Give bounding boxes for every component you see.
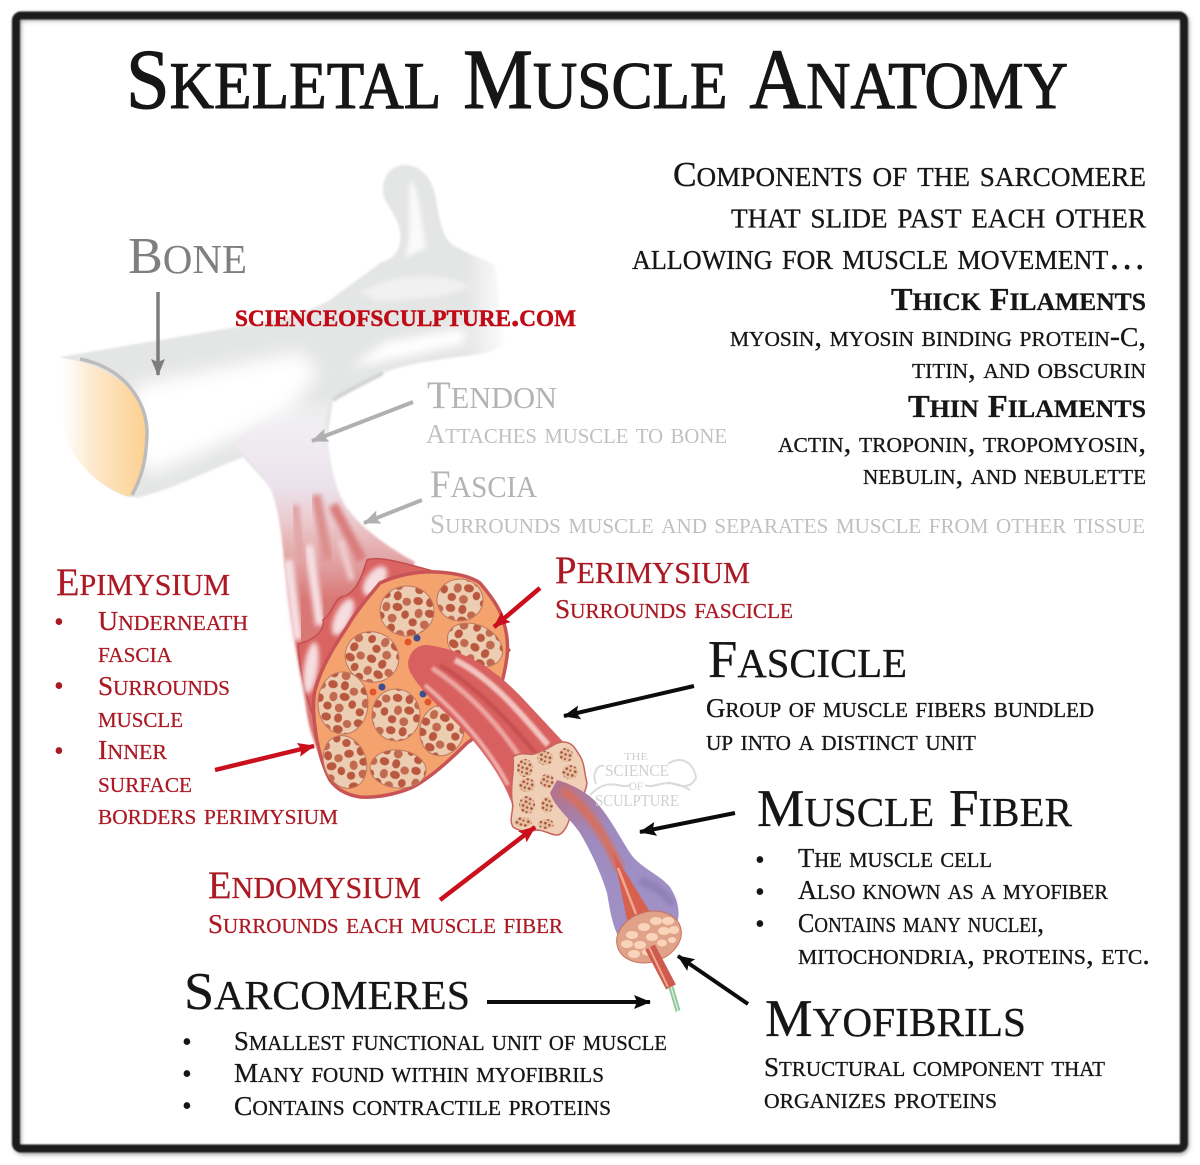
label: epimysium: fascia xyxy=(98,636,173,669)
label: epimysium: borders perimysium xyxy=(98,798,338,831)
myofibril cross-section xyxy=(610,903,688,971)
label: endomysium xyxy=(208,827,563,940)
label: epimysium: • xyxy=(54,607,64,638)
label: muscle fiber: Also known as a myofiber xyxy=(798,873,1108,906)
label: epimysium xyxy=(54,556,338,831)
label: tendon: Attaches muscle to bone xyxy=(426,417,727,450)
label: muscle fiber: • xyxy=(755,877,765,908)
label: sarcomeres: Sarcomeres xyxy=(184,956,470,1022)
label: bone: Bone xyxy=(128,221,247,286)
website url: scienceofsculpture.com xyxy=(235,298,576,334)
text block: components of the sarcomere: Components of the sarcomere xyxy=(673,152,1146,195)
label: muscle fiber: Contains many nuclei, xyxy=(798,906,1044,939)
label: sarcomeres xyxy=(182,956,667,1122)
text block: components of the sarcomere: myosin, myosin binding protein- C, xyxy=(730,320,1146,353)
label: epimysium: Underneath xyxy=(98,604,248,637)
label: tendon: Tendon xyxy=(427,369,557,418)
label: myofibrils: organizes proteins xyxy=(764,1082,997,1115)
label: sarcomeres: • xyxy=(182,1027,192,1058)
label: perimysium: Surrounds fascicle xyxy=(555,592,793,625)
label: sarcomeres: Smallest functional unit of muscle xyxy=(234,1024,667,1057)
watermark logo: SCIENCE xyxy=(605,761,669,780)
text block: components of the sarcomere: Thin Filaments xyxy=(908,386,1146,425)
label: fascia xyxy=(364,458,1145,540)
text block: components of the sarcomere: allowing for muscle movement… xyxy=(632,235,1146,278)
label: endomysium: Endomysium xyxy=(208,859,421,908)
label: muscle fiber: Muscle Fiber xyxy=(757,773,1073,839)
text block: components of the sarcomere: that slide past each other xyxy=(731,194,1146,236)
label: fascicle: up into a distinct unit xyxy=(706,724,976,757)
label: sarcomeres: Contains contractile proteins xyxy=(234,1089,611,1122)
fascicle cross-section xyxy=(511,742,587,835)
watermark logo: OF xyxy=(629,779,643,793)
label: sarcomeres: • xyxy=(182,1091,192,1122)
text block: components of the sarcomere: titin, and obscurin xyxy=(912,352,1146,385)
label: myofibrils: Structural component that xyxy=(764,1050,1105,1083)
label: fascia: Fascia xyxy=(430,458,538,507)
illustration: skeletal muscle from bone to sarcomere xyxy=(55,165,696,1011)
label: epimysium: • xyxy=(54,671,64,702)
text block: components of the sarcomere xyxy=(632,152,1146,491)
label: myofibrils xyxy=(678,956,1105,1115)
label: muscle fiber xyxy=(640,773,1150,971)
label: fascicle: Group of muscle fibers bundled xyxy=(706,691,1094,724)
label: endomysium: Surrounds each muscle fiber xyxy=(208,907,563,940)
label: sarcomeres: • xyxy=(182,1059,192,1090)
bone xyxy=(55,165,525,497)
label: epimysium: Epimysium xyxy=(56,556,230,605)
label: muscle fiber: • xyxy=(755,845,765,876)
watermark logo xyxy=(590,751,696,810)
single myofibril xyxy=(649,947,671,987)
label: epimysium: • xyxy=(54,736,64,767)
label: muscle fiber: The muscle cell xyxy=(798,841,992,874)
tendon and fascia-covered muscle belly xyxy=(232,390,510,780)
label: fascia: Surrounds muscle and separates muscle from other tissue xyxy=(430,507,1145,540)
label: epimysium: muscle xyxy=(98,701,183,734)
text block: components of the sarcomere: Thick Filaments xyxy=(891,279,1146,318)
label: perimysium: Perimysium xyxy=(555,544,750,593)
text block: components of the sarcomere: actin, troponin, tropomyosin, xyxy=(778,426,1146,459)
label: myofibrils: Myofibrils xyxy=(765,983,1026,1049)
title: Skeletal Muscle Anatomy xyxy=(126,23,1068,129)
label: epimysium: Surrounds xyxy=(98,669,230,702)
muscle fiber with endomysium sheath xyxy=(550,780,679,940)
label: fascicle: Fascicle xyxy=(708,624,907,690)
label: epimysium: surface xyxy=(98,766,192,799)
text block: components of the sarcomere: nebulin, and nebulette xyxy=(863,458,1146,491)
large muscle cross-section with fascicles xyxy=(314,572,510,797)
label: perimysium xyxy=(494,544,793,627)
label: epimysium: Inner xyxy=(98,733,167,766)
label: fascicle xyxy=(564,624,1094,757)
fascicle tube xyxy=(408,645,568,815)
label: muscle fiber: mitochondria, proteins, etc. xyxy=(798,938,1150,971)
watermark logo: SCULPTURE xyxy=(595,791,679,810)
label: sarcomeres: Many found within myofibrils xyxy=(234,1056,604,1089)
sarcomere filament xyxy=(671,987,678,1011)
watermark logo: THE xyxy=(624,751,648,763)
label: muscle fiber: • xyxy=(755,909,765,940)
label: tendon xyxy=(312,369,727,450)
